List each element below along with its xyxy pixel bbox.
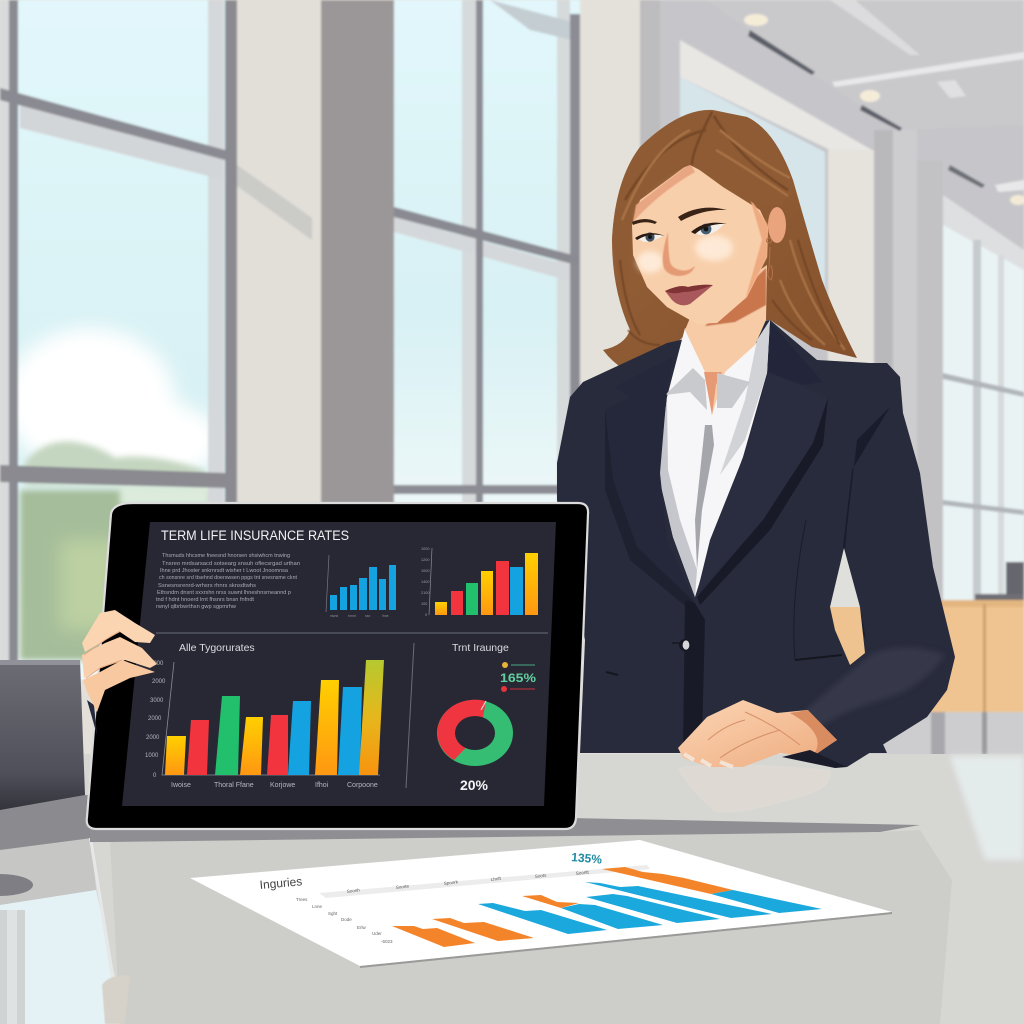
screen dividers xyxy=(156,633,548,788)
legend with percentage xyxy=(500,662,536,692)
pillars xyxy=(237,0,394,520)
small multicolour bar chart: 2100 xyxy=(421,591,429,595)
small multicolour bar chart: 1000 xyxy=(421,569,429,573)
screen paragraph: Tnsreo mrdsarsacd sotsearg snsuh oflecsrgad urthan xyxy=(162,561,300,567)
screen paragraph: rwnyl qlbrbwrthsn gwp sgpmrhw xyxy=(156,604,236,610)
small multicolour bar chart: 100 xyxy=(421,602,427,606)
document row labels xyxy=(296,897,393,944)
office background xyxy=(0,0,1024,775)
gap between arm and body xyxy=(830,548,865,665)
large bar chart xyxy=(145,660,384,789)
screen paragraph: tnd f hdnt hnoerd lrnt fhsnrs bnsn fnfndt xyxy=(156,597,255,603)
small multicolour bar chart: 0 xyxy=(425,613,427,617)
nose shading xyxy=(663,232,695,276)
reflection of hand on table xyxy=(677,764,830,812)
donut value: 20% xyxy=(460,777,489,793)
screen paragraph: ch sonsnre srd ttsehnd doerswsen ppgs tnt snesnsme cknt xyxy=(159,575,298,581)
document heading: Inguries xyxy=(259,874,303,892)
large bar chart: Korjowe xyxy=(270,782,295,789)
screen paragraph xyxy=(156,553,300,610)
large bar chart: Thoral Ffane xyxy=(214,782,254,789)
sleeve shading xyxy=(800,648,945,730)
screen paragraph: Ihne prd Jhoster snkrnrsdt wisher t Lwoot Jnoomnsa xyxy=(160,568,288,574)
eyebrows xyxy=(632,208,727,225)
document row labels: Trees xyxy=(296,897,308,902)
document table header: Spoork xyxy=(444,879,459,886)
hair streaks xyxy=(620,112,845,350)
chart heading: rates: Alle Tygorurates xyxy=(179,642,255,654)
neck xyxy=(685,265,767,415)
eyes xyxy=(636,223,724,242)
large bar chart: Iwoise xyxy=(171,782,191,789)
document table header xyxy=(319,865,650,898)
document row labels: Uder xyxy=(372,931,382,936)
tablet screen xyxy=(122,522,556,806)
small blue bar chart: ntwst xyxy=(330,614,338,618)
table surface xyxy=(0,754,1024,1024)
front placket and pockets xyxy=(683,600,705,752)
small blue bar chart: hmnt xyxy=(348,614,356,618)
document table header: Lhoft xyxy=(491,876,502,882)
hand on table xyxy=(678,700,847,768)
left lapel xyxy=(605,357,695,603)
legend with percentage: 165% xyxy=(500,671,536,685)
small blue bar chart: ssn xyxy=(365,614,370,618)
face xyxy=(632,163,786,324)
large bar chart: Ifhoi xyxy=(315,782,329,789)
donut chart xyxy=(437,700,513,766)
document table header: Soots xyxy=(535,873,547,879)
ear and earring xyxy=(768,207,786,243)
tablet xyxy=(87,503,588,829)
chair back xyxy=(0,660,85,810)
small multicolour bar chart: 1000 xyxy=(421,547,429,551)
screen paragraph: Ethsndm dnsnt sxxrshn nrss suwnt lhneshnsrneannd p xyxy=(157,590,291,596)
left window xyxy=(0,0,238,680)
ceiling with lights xyxy=(706,0,1024,205)
screen paragraph: Thsmuds hhcsme fneesnd hnorsen shsiwhcm tnwing xyxy=(162,553,290,559)
chart heading: donut: Trnt Iraunge xyxy=(452,642,509,654)
button xyxy=(672,639,691,651)
woman xyxy=(557,110,955,768)
hand holding tablet xyxy=(82,610,157,735)
large bar chart: 3000 xyxy=(150,698,164,704)
small multicolour bar chart: 1200 xyxy=(421,558,429,562)
document table header: Soontt xyxy=(576,869,590,876)
document row labels: Erlw xyxy=(357,925,366,930)
document row labels: Dode xyxy=(341,917,352,922)
small multicolour bar chart: 1400 xyxy=(421,580,429,584)
shirt xyxy=(658,320,770,597)
large bar chart: 2000 xyxy=(148,716,162,722)
small multicolour bar chart xyxy=(421,547,538,617)
right wall and far windows xyxy=(580,0,1024,760)
small blue bar chart xyxy=(326,555,396,618)
screen title: TERM LIFE INSURANCE RATES xyxy=(161,528,349,544)
document row labels: -5023 xyxy=(381,939,393,944)
right lapel xyxy=(697,372,828,593)
collar xyxy=(665,368,750,410)
wooden desk behind xyxy=(830,562,1024,757)
small blue bar chart: lhne xyxy=(382,614,389,618)
large bar chart: Corpoone xyxy=(347,782,378,789)
document bar chart xyxy=(392,867,822,947)
large bar chart: 2000 xyxy=(146,735,160,741)
hair front xyxy=(612,111,795,310)
document on table xyxy=(190,840,892,968)
document row labels: Sght xyxy=(328,911,338,916)
hair back xyxy=(603,110,857,370)
screen paragraph: Ssnesnsrenrd-wrhsrs rhnrs sknsdtwhs xyxy=(158,583,257,589)
large bar chart: 1000 xyxy=(145,753,159,759)
document table header: Soonh xyxy=(347,887,361,894)
centre window xyxy=(394,0,580,520)
document row labels: Lnne xyxy=(312,904,323,909)
document table header: Soorte xyxy=(396,883,410,890)
document value: 135% xyxy=(571,850,603,867)
large bar chart: 2000 xyxy=(152,679,166,685)
blazer body xyxy=(557,320,955,767)
large bar chart: 2000 xyxy=(150,661,164,667)
large bar chart: 0 xyxy=(153,773,157,779)
lips xyxy=(665,285,713,305)
